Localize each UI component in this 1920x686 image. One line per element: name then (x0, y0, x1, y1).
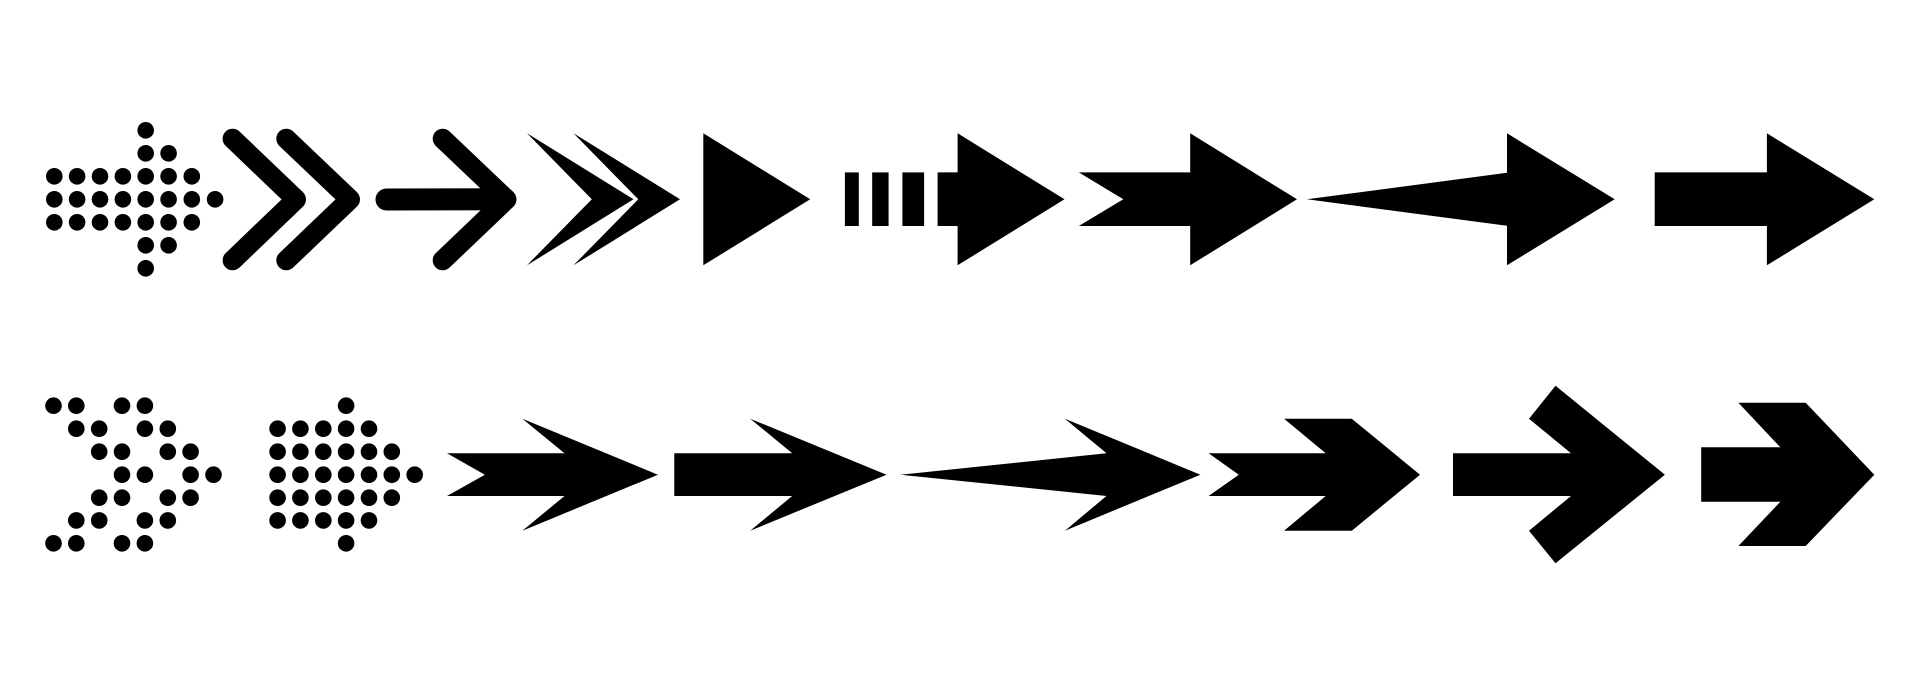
icon: notched swept-barb arrow (447, 419, 658, 531)
icon: needle swept-barb arrow (900, 419, 1200, 531)
icon: square tail swept-barb arrow (674, 419, 886, 531)
icon: dotted arrow (46, 122, 223, 277)
icon: notched tail arrow (1079, 133, 1297, 265)
row 1: top row of arrows (46, 122, 1874, 277)
icon: dotted block arrow (269, 397, 423, 552)
icon: striped tail arrow (845, 133, 1064, 265)
icon: block arrow (1655, 133, 1874, 265)
icon: dotted double chevron (45, 397, 222, 552)
icon: notched chunky-head arrow (1209, 419, 1420, 531)
row 2: bottom row of arrows (45, 386, 1874, 563)
icon: angled wide-head arrow (1453, 386, 1665, 563)
icon: double sharp chevron (527, 133, 680, 265)
icon: heavy chunky-head arrow (1701, 403, 1874, 546)
icon: double rounded chevron (233, 139, 350, 260)
icon: solid triangle (703, 133, 810, 265)
icon: tapered needle arrow (1307, 133, 1615, 265)
icon: rounded line arrow (386, 139, 506, 260)
